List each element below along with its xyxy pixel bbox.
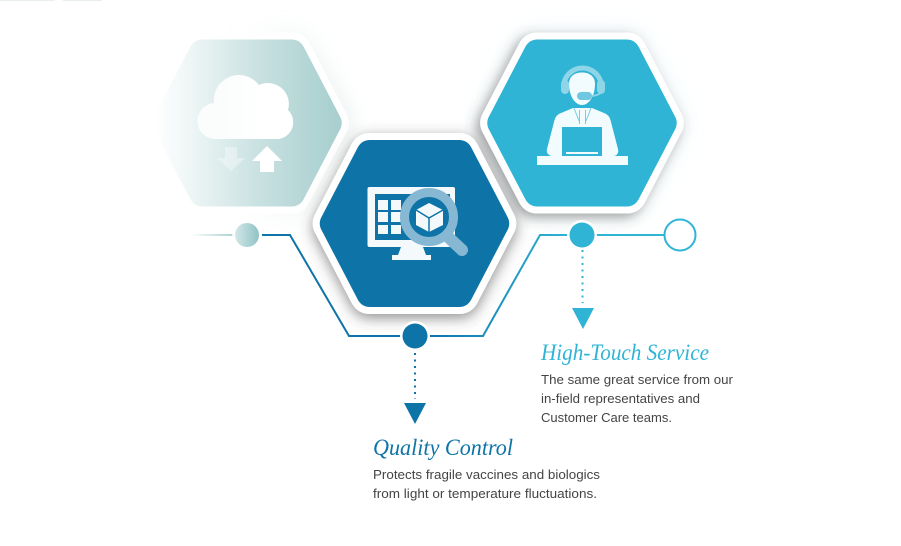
dotted arrow: high-touch service — [572, 250, 594, 329]
cloud — [197, 75, 293, 139]
node: cloud — [232, 220, 262, 250]
connector line: to open node — [595, 234, 665, 236]
hexagon: quality control — [320, 140, 509, 307]
monitor frame — [368, 187, 455, 247]
description: Protects fragile vaccines and biologics — [373, 467, 601, 482]
monitor stand — [392, 247, 431, 260]
screen grid — [378, 200, 401, 234]
description: from light or temperature fluctuations. — [373, 486, 597, 501]
connector line: left segment — [190, 235, 402, 336]
node: high-touch service — [567, 220, 597, 250]
hexagon: cloud — [152, 40, 342, 206]
description: in-field representatives and — [541, 391, 700, 406]
hexagon: high-touch service — [487, 40, 677, 206]
dotted arrow: quality control — [404, 353, 426, 424]
ear pieces — [561, 80, 569, 94]
magnifier lens — [404, 192, 454, 242]
cube — [416, 203, 443, 232]
description — [541, 372, 734, 425]
icon: monitor with magnifier — [368, 187, 462, 260]
headset band — [564, 68, 602, 87]
head — [569, 72, 595, 105]
node: quality control — [400, 321, 430, 351]
connector line: right segment — [428, 235, 570, 336]
top edge bars — [0, 0, 102, 1]
screen — [375, 194, 450, 240]
collar and tie — [574, 108, 591, 124]
download arrow — [217, 147, 245, 171]
heading: Quality Control — [373, 435, 513, 460]
body — [547, 108, 618, 156]
description: The same great service from our — [541, 372, 734, 387]
magnifier handle — [446, 235, 462, 250]
description: Customer Care teams. — [541, 410, 672, 425]
icon: cloud with arrows — [197, 75, 293, 172]
open node — [664, 220, 696, 250]
laptop — [562, 127, 602, 157]
description — [373, 467, 601, 501]
microphone — [590, 92, 602, 96]
desk — [537, 156, 628, 165]
icon: customer service agent — [537, 68, 628, 165]
upload arrow — [252, 146, 282, 172]
text: high-touch service — [540, 340, 734, 425]
heading: High-Touch Service — [540, 340, 709, 365]
text: quality control — [373, 435, 601, 501]
